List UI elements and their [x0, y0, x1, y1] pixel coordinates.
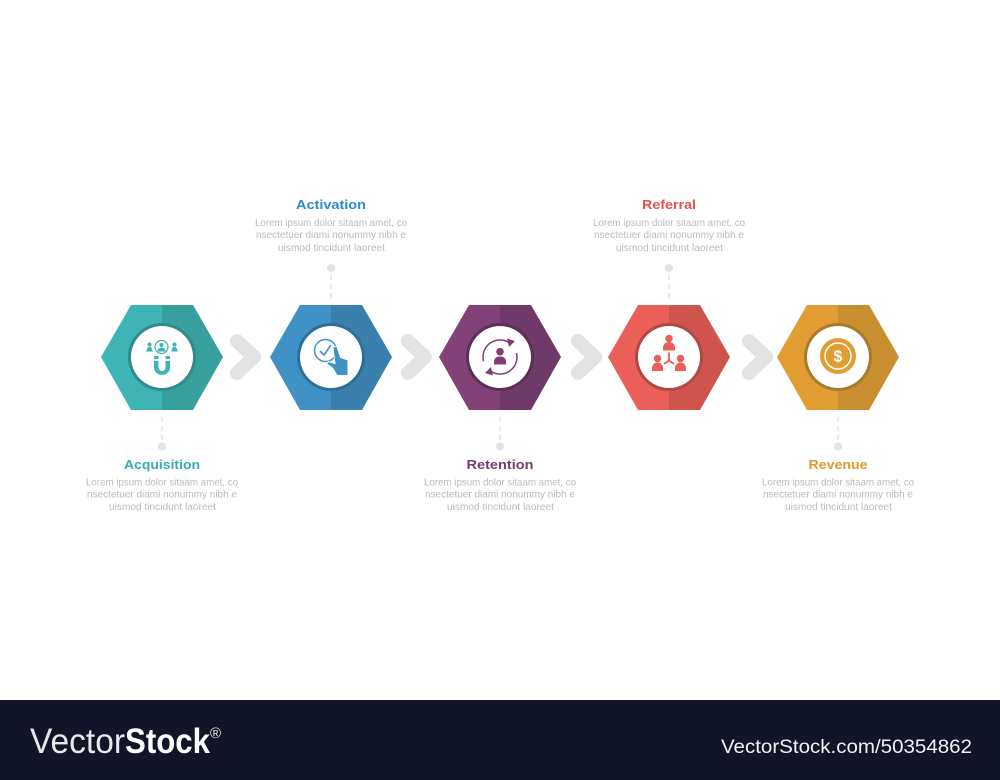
footer logo: VectorStock: [30, 722, 221, 761]
step 5: Revenue: [762, 305, 914, 513]
connector: Retention: [496, 417, 504, 450]
footer id: VectorStock.com/50354862: VectorStock.com/50354862: [721, 737, 972, 758]
footer logo: VectorStock: ®: [210, 725, 221, 742]
hexagon: Acquisition: [101, 305, 223, 410]
text block: Revenue: nsectetuer diami nonummy nibh e: [763, 490, 913, 500]
text block: Retention: [424, 478, 576, 513]
footer logo: VectorStock: Vector: [30, 722, 125, 761]
text block: Activation: nsectetuer diami nonummy nibh e: [256, 230, 406, 241]
icon: dollar coin: $: [834, 348, 843, 366]
hexagon: Activation: [270, 305, 392, 410]
footer logo: VectorStock: Stock: [125, 722, 210, 761]
text block: Activation: Lorem ipsum dolor sitaam amet, co: [255, 218, 407, 229]
text block: Activation: [255, 218, 407, 254]
connector: Revenue: [834, 417, 842, 450]
icon: hand tapping checkmark: [314, 340, 348, 376]
icon: person in circular arrows: [483, 338, 517, 376]
heading: Revenue: Revenue: [808, 457, 868, 472]
text block: Acquisition: [86, 478, 238, 513]
heading: Activation: Activation: [296, 197, 366, 212]
text block: Retention: uismod tincidunt laoreet: [447, 502, 554, 513]
text block: Acquisition: Lorem ipsum dolor sitaam amet, co: [86, 478, 238, 488]
connector: Acquisition: [158, 417, 166, 450]
text block: Acquisition: nsectetuer diami nonummy nibh e: [87, 490, 237, 500]
step 3: Retention: [424, 305, 576, 513]
icon: referral network of people: [652, 335, 686, 371]
text block: Referral: Lorem ipsum dolor sitaam amet, co: [593, 218, 745, 229]
icon: dollar coin: [820, 338, 856, 374]
arrow 1: [237, 341, 254, 373]
text block: Revenue: Lorem ipsum dolor sitaam amet, co: [762, 478, 914, 488]
heading: Retention: Retention: [466, 457, 534, 472]
arrow 3: [578, 341, 595, 373]
step 4: Referral: [593, 197, 745, 410]
text block: Referral: [593, 218, 745, 254]
hexagon: Referral: [608, 305, 730, 410]
text block: Retention: nsectetuer diami nonummy nibh e: [425, 490, 575, 500]
hexagon: Retention: [439, 305, 561, 410]
text block: Activation: uismod tincidunt laoreet: [278, 243, 385, 254]
heading: Acquisition: Acquisition: [124, 457, 200, 472]
hexagon: Revenue: [777, 305, 899, 410]
footer bar: [0, 700, 1000, 780]
text block: Revenue: [762, 478, 914, 513]
connector: Activation: [327, 264, 335, 299]
arrow 2: [408, 341, 425, 373]
text block: Revenue: uismod tincidunt laoreet: [785, 502, 892, 513]
text block: Acquisition: uismod tincidunt laoreet: [109, 502, 216, 513]
text block: Referral: uismod tincidunt laoreet: [616, 243, 723, 254]
connector: Referral: [665, 264, 673, 299]
icon: magnet attracting people: [146, 340, 178, 375]
arrow 4: [749, 341, 766, 373]
step 1: Acquisition: [86, 305, 238, 513]
text block: Retention: Lorem ipsum dolor sitaam amet, co: [424, 478, 576, 488]
text block: Referral: nsectetuer diami nonummy nibh e: [594, 230, 744, 241]
step 2: Activation: [255, 197, 407, 410]
heading: Referral: Referral: [642, 197, 696, 212]
